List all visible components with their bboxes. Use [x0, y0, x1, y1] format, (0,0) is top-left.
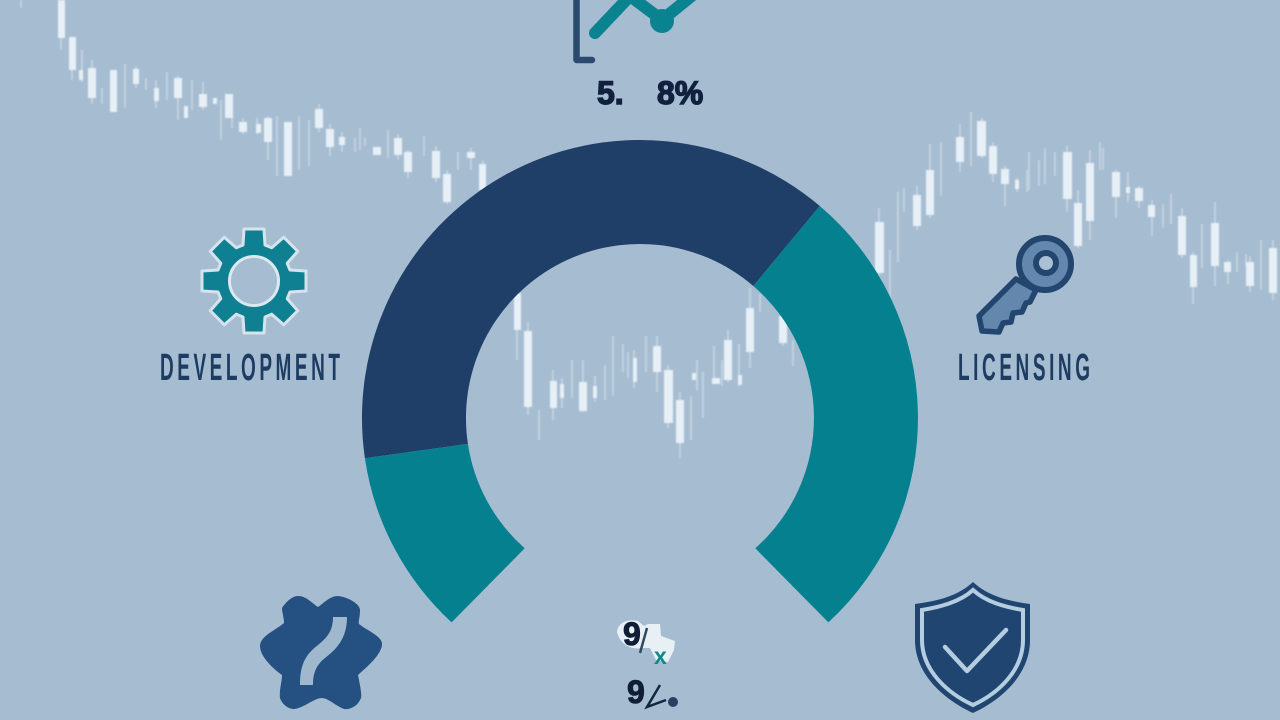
icon: navy scalloped badge: [260, 596, 382, 709]
gauge segment: large navy arc: [362, 140, 820, 458]
trend line: [595, 0, 694, 33]
icon: development gear: [202, 229, 306, 333]
top percentage value: 8%: [657, 75, 703, 111]
percentage characters: 9: [623, 616, 641, 652]
slash mark: [647, 685, 666, 707]
decimal dot: [668, 697, 678, 707]
lower percentage value: [627, 674, 678, 710]
trend point: [650, 9, 674, 33]
gauge segment: right teal arc: [753, 206, 918, 622]
chart axis: [576, 0, 592, 60]
top percentage value: 5.: [597, 75, 624, 111]
donut gauge chart: [362, 140, 918, 622]
bottom percentage value with highlight: [617, 616, 675, 669]
label: licensing: LICENSING: [958, 347, 1090, 389]
icon: growth line chart: [576, 0, 694, 60]
slash mark: [640, 628, 647, 653]
candlestick chart background: [21, 0, 1277, 458]
highlight blob: [617, 620, 675, 662]
lower percentage value: 9: [627, 674, 645, 710]
icon: security shield: [915, 582, 1030, 713]
icon: licensing key: [979, 238, 1071, 332]
teal mark: x: [654, 643, 667, 669]
top percentage value: [597, 75, 703, 111]
gauge segment: lower-left teal arc: [365, 444, 525, 622]
label: development: DEVELOPMENT: [160, 347, 340, 389]
